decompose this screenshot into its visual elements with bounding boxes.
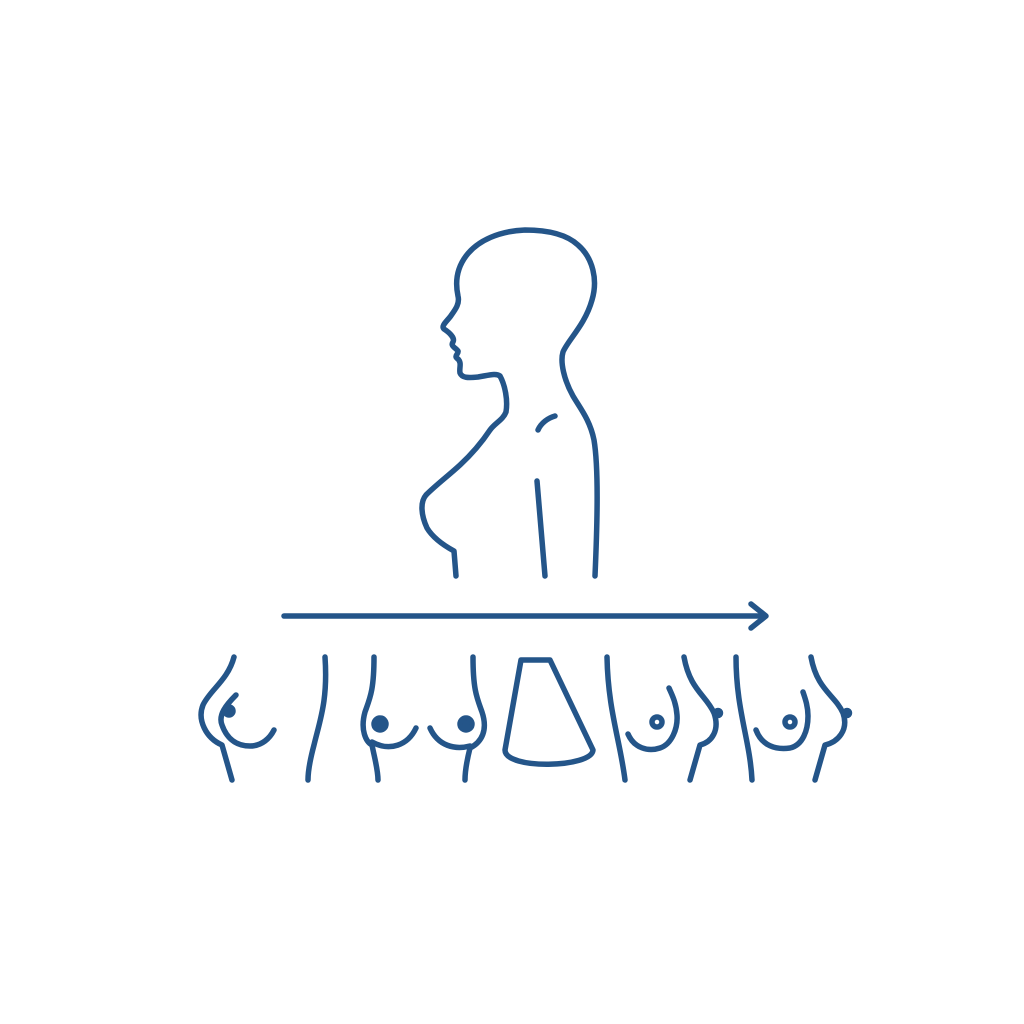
icon: shape 2 [308, 657, 326, 780]
icon: trapezoid [505, 660, 593, 764]
icon: shape 1 [201, 657, 274, 780]
icon: shape 6 [607, 657, 677, 780]
icon: shape 7 [684, 657, 720, 780]
icon: shape 3 [363, 657, 416, 780]
arrow [284, 604, 766, 628]
icon: female profile silhouette [422, 230, 597, 576]
icon: shape 4 [430, 657, 484, 780]
icon: shape 9 [811, 657, 850, 780]
icon: shape 8 [736, 657, 808, 780]
icon row: breast shapes [201, 657, 850, 780]
